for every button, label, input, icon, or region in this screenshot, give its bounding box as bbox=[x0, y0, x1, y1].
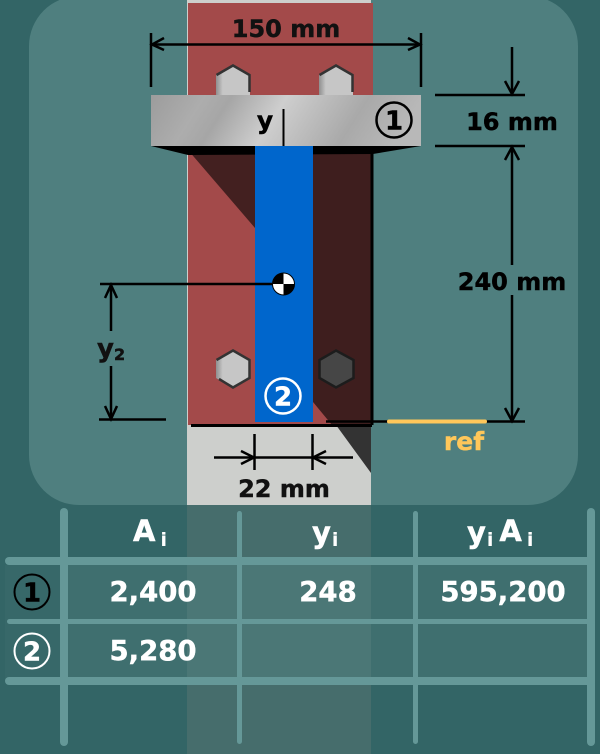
part 1 marker: 1 bbox=[385, 106, 403, 136]
bolt bottom right bbox=[319, 350, 354, 388]
dark right side of web bbox=[313, 146, 373, 425]
label 240 mm backing bbox=[456, 265, 570, 295]
column edge lines bbox=[191, 150, 372, 426]
column strip overlay under table bbox=[187, 505, 371, 754]
row marker 1: 1 bbox=[23, 578, 41, 608]
width dimension 150 mm bbox=[151, 33, 421, 87]
width dimension 22 mm bbox=[214, 434, 353, 470]
part 2 marker bbox=[266, 378, 300, 414]
blue web part 2 bbox=[255, 146, 313, 422]
bolt bottom left bbox=[216, 350, 250, 388]
table header yiAi: y bbox=[467, 516, 486, 550]
bolt top left bbox=[216, 65, 250, 96]
table header yi: i bbox=[332, 529, 338, 551]
value 595,200: 595,200 bbox=[440, 576, 566, 608]
label y: y bbox=[257, 106, 273, 135]
text 240 mm: 240 mm bbox=[458, 268, 566, 296]
value 248: 248 bbox=[299, 576, 357, 608]
label ref: ref bbox=[444, 427, 485, 456]
flange shadow bbox=[151, 146, 421, 155]
part 1 marker bbox=[376, 102, 412, 138]
table grid bbox=[5, 508, 595, 746]
table header Ai: i bbox=[160, 529, 167, 551]
table header yiAi: i bbox=[527, 529, 533, 551]
dark shadow triangle left bbox=[188, 150, 255, 228]
y2 dimension bbox=[99, 285, 166, 420]
row marker 2 bbox=[14, 634, 50, 668]
row marker 1 bbox=[14, 574, 50, 610]
bolt top right bbox=[319, 65, 353, 96]
label 150 mm: 150 mm bbox=[232, 15, 340, 43]
background panel bbox=[29, 0, 578, 505]
column shadow below bottom edge bbox=[336, 425, 371, 473]
reference line bbox=[326, 420, 525, 423]
table header yiAi: A bbox=[499, 514, 522, 548]
centroid symbol bbox=[272, 273, 294, 295]
label y2: y bbox=[97, 334, 114, 364]
row marker 2: 2 bbox=[23, 638, 41, 668]
value 2,400: 2,400 bbox=[110, 576, 196, 608]
flange thickness dimension bbox=[435, 47, 525, 421]
text 16 mm: 16 mm bbox=[466, 108, 558, 136]
centroid leader line bbox=[100, 283, 275, 285]
table header yiAi: i bbox=[487, 529, 493, 551]
column red web bbox=[188, 3, 373, 425]
part 2 marker: 2 bbox=[274, 382, 292, 412]
label y2: 2 bbox=[114, 345, 125, 364]
value 5,280: 5,280 bbox=[110, 635, 196, 667]
flange part 1 bbox=[151, 95, 421, 146]
column base plate bbox=[187, 0, 371, 505]
y axis tick bbox=[282, 109, 284, 146]
table header yi: y bbox=[312, 516, 331, 550]
table header Ai: A bbox=[133, 514, 155, 548]
label 22 mm: 22 mm bbox=[238, 475, 330, 503]
label 16 mm bbox=[462, 106, 562, 136]
table row shading bbox=[5, 565, 591, 681]
